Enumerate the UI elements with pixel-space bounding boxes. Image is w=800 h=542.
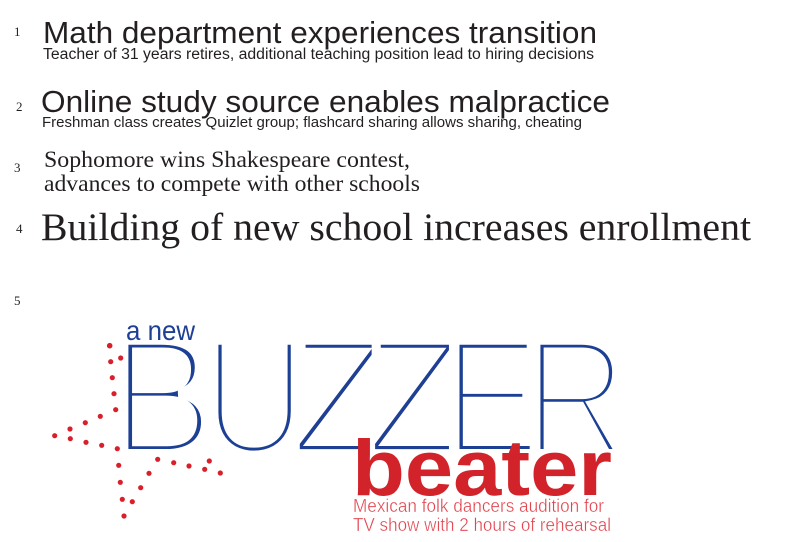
item 5: buzzer beater graphic: [52, 304, 628, 535]
heading: new school: Building of new school increases enrollment: [41, 206, 751, 249]
heading: shakespeare contest: Sophomore wins Shakespeare contest,: [44, 147, 410, 172]
number 3: 3: [14, 160, 20, 175]
subheading: math department: Teacher of 31 years retires, additional teaching position lead to hiring decisions: [43, 46, 594, 63]
number 2: 2: [16, 99, 22, 114]
word: BUZZER: R: [523, 304, 628, 489]
caption: mexican folk dancers: TV show with 2 hours of rehearsal: [353, 515, 611, 535]
word: BUZZER: E: [442, 305, 541, 490]
number 5: 5: [14, 293, 20, 308]
word: BUZZER: B: [110, 305, 215, 490]
caption: mexican folk dancers: Mexican folk dancers audition for: [353, 496, 604, 516]
number 1: 1: [14, 24, 20, 39]
subheading: online study source: Freshman class creates Quizlet group; flashcard sharing allows sharing, cheating: [42, 114, 582, 131]
word: BUZZER: [110, 304, 628, 490]
word: BUZZER: U: [202, 305, 307, 490]
heading: online study source: Online study source enables malpractice: [41, 84, 610, 119]
label: a new: a new: [126, 315, 196, 346]
word: BUZZER: Z: [290, 304, 389, 489]
item 4: new school: [16, 206, 751, 249]
item 1: math department: [14, 16, 597, 63]
item 3: shakespeare contest: [14, 147, 420, 196]
word: BUZZER: Z: [366, 305, 463, 490]
star of red dots: [52, 343, 223, 519]
number 4: 4: [16, 221, 23, 236]
heading: shakespeare contest: advances to compete with other schools: [44, 171, 420, 196]
heading: math department: Math department experiences transition: [43, 16, 597, 50]
word: beater: beater: [352, 423, 612, 512]
item 2: online study source: [16, 84, 610, 131]
